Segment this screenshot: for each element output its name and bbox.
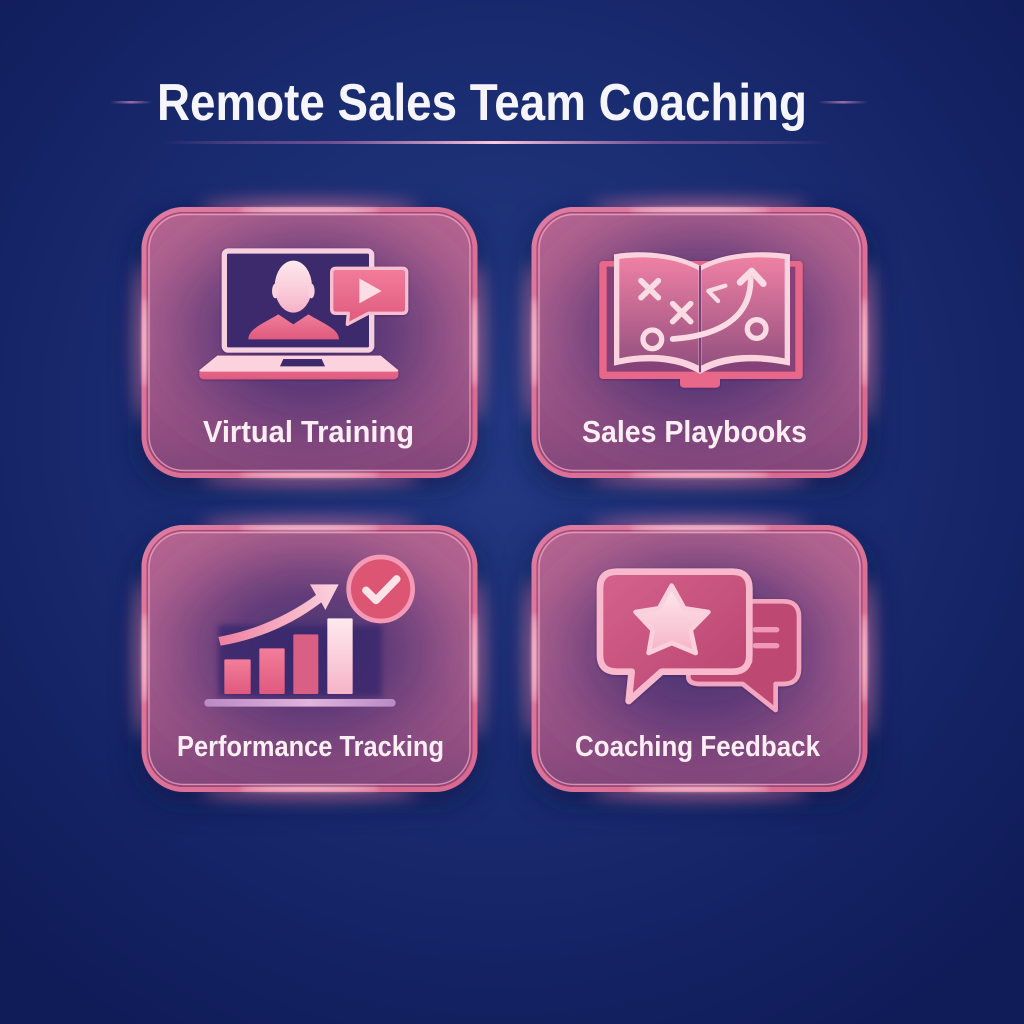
laptop screen	[224, 251, 372, 350]
laptop base	[199, 356, 398, 379]
front bubble	[600, 572, 749, 701]
panel: coaching feedback	[514, 515, 884, 804]
label: sales playbooks: Sales Playbooks	[582, 414, 807, 449]
growth arrow	[218, 584, 339, 646]
video bubble	[332, 268, 407, 324]
icon: laptop with video bubble	[199, 251, 407, 379]
bars	[224, 618, 353, 694]
panel: virtual training	[124, 192, 494, 490]
label: virtual training: Virtual Training	[203, 414, 414, 449]
person	[248, 261, 339, 339]
label: performance tracking: Performance Tracking	[177, 731, 444, 763]
book cover	[599, 261, 803, 388]
title: Remote Sales Team Coaching	[157, 74, 807, 132]
baseline	[204, 699, 396, 707]
icon: open playbook	[599, 252, 803, 388]
playbook marks	[641, 271, 766, 349]
icon: feedback speech bubbles	[600, 572, 799, 710]
icon: growth chart with check badge	[204, 557, 413, 707]
star	[636, 586, 708, 653]
back bubble	[688, 601, 799, 710]
check badge	[349, 557, 413, 621]
label: coaching feedback: Coaching Feedback	[575, 731, 821, 763]
panel: sales playbooks	[514, 192, 884, 490]
book pages	[614, 252, 790, 374]
panel: performance tracking	[124, 515, 494, 804]
